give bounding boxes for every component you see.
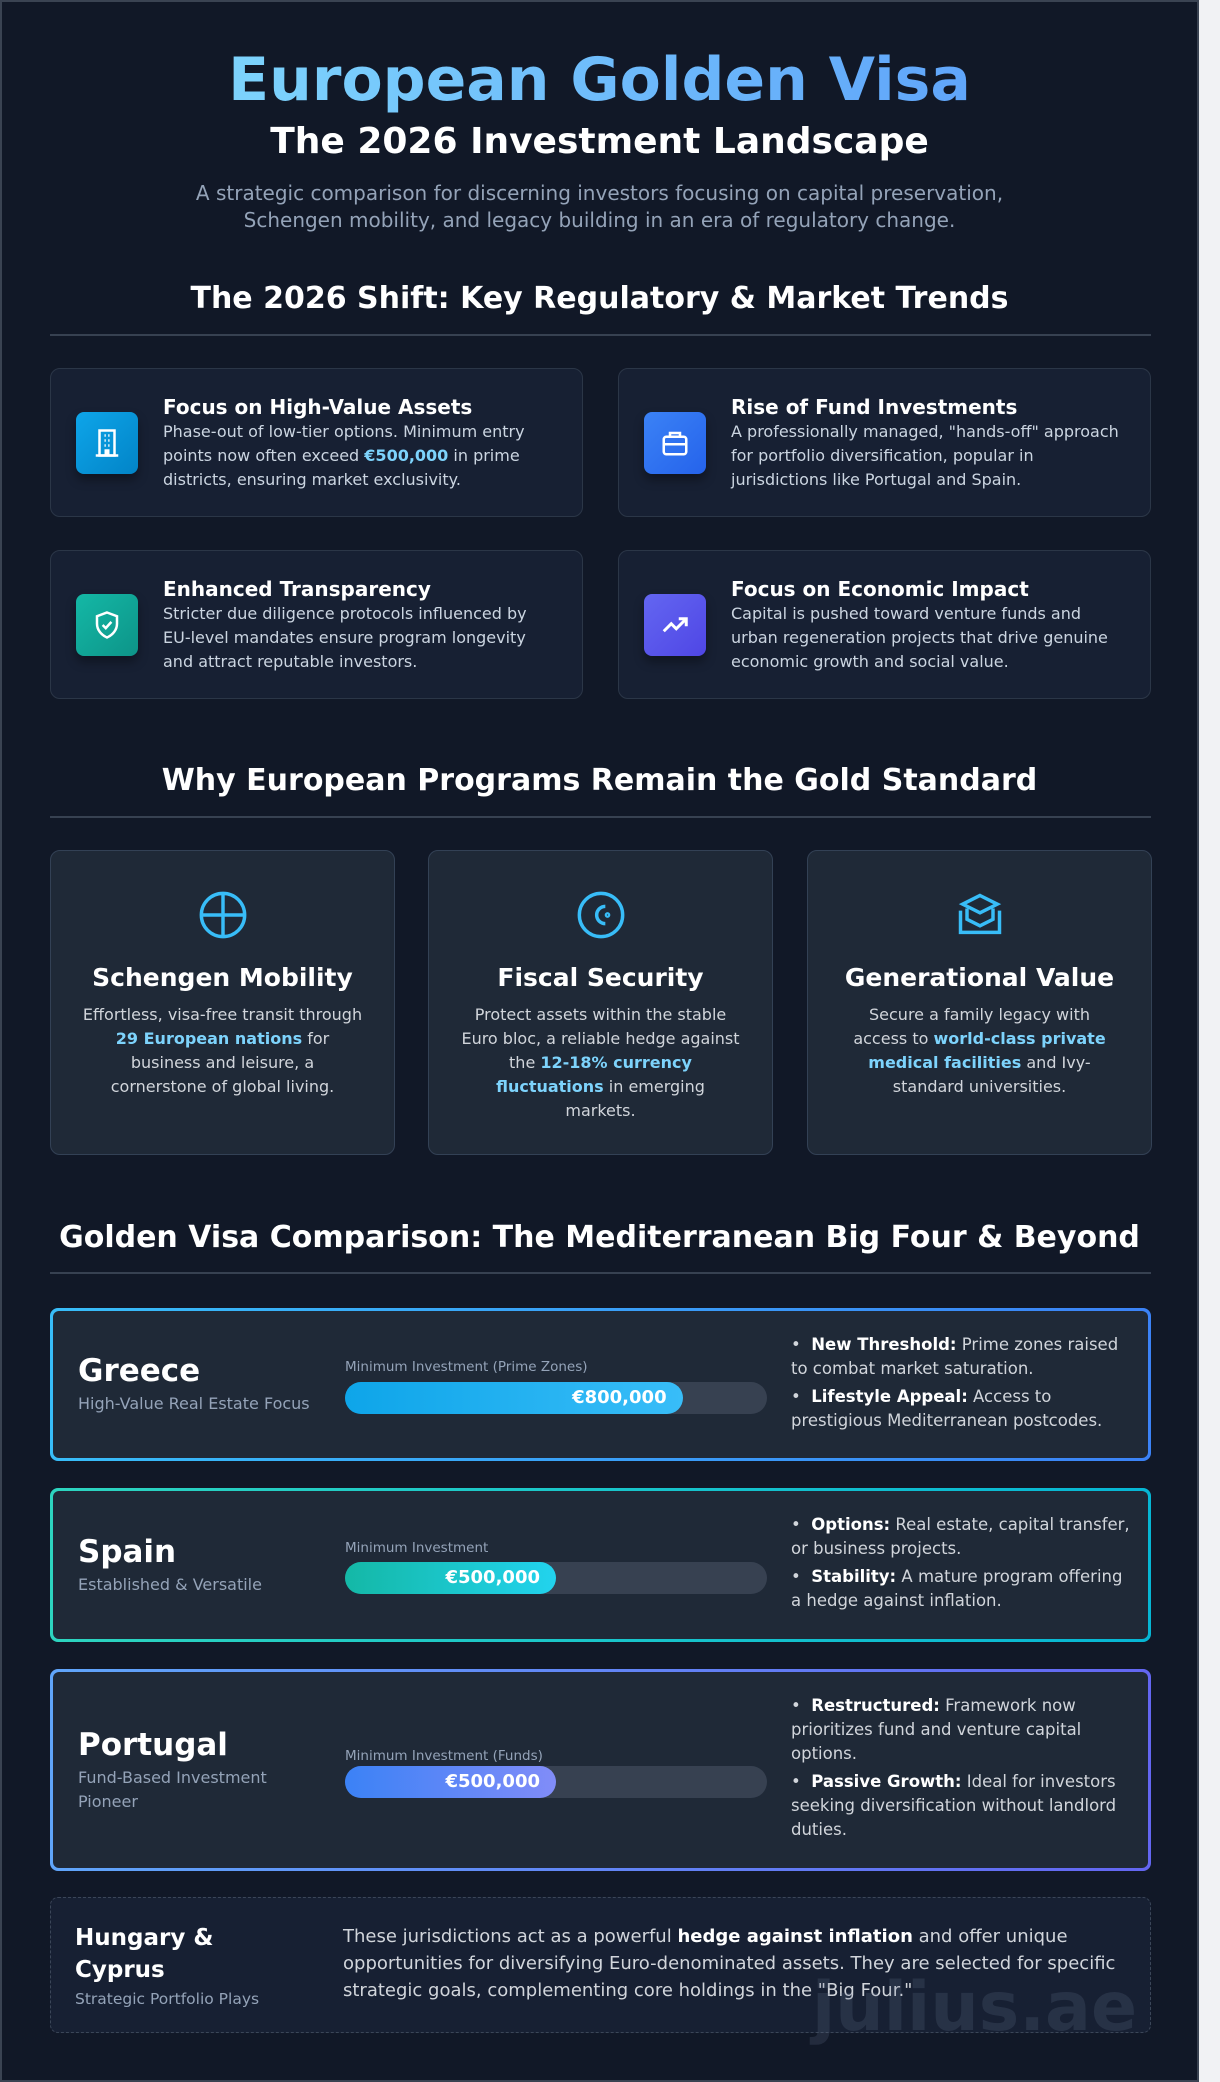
card: generational: Secure a family legacy with: [869, 1005, 1090, 1024]
card: generational: Generational Value: [845, 963, 1114, 992]
panel: portugal: options.: [791, 1744, 857, 1763]
bar: portugal: [345, 1766, 767, 1798]
card: fiscal: [428, 850, 773, 1155]
watermark: julius.ae: [812, 1968, 1137, 2047]
panel: spain: Minimum Investment: [345, 1540, 488, 1556]
card: fund investments: Rise of Fund Investments: [731, 395, 1017, 419]
panel: portugal: Portugal: [78, 1727, 228, 1763]
panel: hungary & cyprus: [50, 1897, 1151, 2033]
panel: spain: [50, 1488, 1151, 1642]
icon: currency: [578, 892, 624, 938]
panel: portugal: • Restructured: Framework now: [791, 1696, 1076, 1715]
icon: shield: [76, 594, 138, 656]
icon: building: [76, 412, 138, 474]
panel: hungary & cyprus: Hungary &: [75, 1925, 213, 1951]
panel: hungary & cyprus: These jurisdictions act as a powerful hedge against inflation and offer unique opportunities for diversifying Euro-denominated assets. They are selected for specific strategic goals, complementing core holdings in the "Big Four.": [343, 1926, 1115, 2001]
card: fiscal: Fiscal Security: [497, 963, 704, 992]
panel: spain: • Stability: A mature program offering: [791, 1567, 1122, 1586]
card: schengen: 29 European nations for: [116, 1029, 329, 1048]
card: schengen: cornerstone of global living.: [111, 1077, 334, 1096]
card: high-value assets: [50, 368, 583, 517]
card: fiscal: Protect assets within the stable: [475, 1005, 726, 1024]
panel: spain: Established & Versatile: [78, 1575, 262, 1594]
card: fund investments: [618, 368, 1151, 517]
panel: spain: or business projects.: [791, 1539, 961, 1558]
icon: graduation: [958, 894, 1002, 934]
panel: portugal: • Passive Growth: Ideal for investors: [791, 1772, 1116, 1791]
card: fiscal: Euro bloc, a reliable hedge against: [461, 1029, 740, 1048]
panel: greece: prestigious Mediterranean postcodes.: [791, 1411, 1102, 1430]
card: generational: access to world-class private: [853, 1029, 1106, 1048]
icon: briefcase: [644, 412, 706, 474]
card: transparency: [50, 550, 583, 699]
card: economic impact: urban regeneration projects that drive genuine: [731, 628, 1108, 647]
panel: spain: • Options: Real estate, capital transfer,: [791, 1515, 1130, 1534]
heading: gold standard: Why European Programs Remain the Gold Standard: [162, 763, 1037, 798]
bar: greece: €800,000: [572, 1387, 667, 1408]
card: fiscal: markets.: [565, 1101, 636, 1120]
panel: spain: a hedge against inflation.: [791, 1591, 1002, 1610]
card: schengen: Effortless, visa-free transit through: [83, 1005, 362, 1024]
card: fiscal: the 12-18% currency: [509, 1053, 692, 1072]
card: fund investments: A professionally managed, "hands-off" approach: [731, 422, 1119, 441]
intro text: Schengen mobility, and legacy building in an era of regulatory change.: [244, 208, 955, 232]
panel: portugal: seeking diversification without landlord: [791, 1796, 1116, 1815]
bar: portugal: €500,000: [445, 1771, 540, 1792]
panel: hungary & cyprus: Cyprus: [75, 1957, 165, 1983]
card: high-value assets: points now often exceed €500,000 in prime: [163, 446, 520, 465]
card: transparency: Enhanced Transparency: [163, 577, 431, 601]
panel: portugal: Minimum Investment (Funds): [345, 1748, 543, 1764]
card: economic impact: economic growth and social value.: [731, 652, 1009, 671]
intro text: [196, 181, 1003, 232]
panel: portugal: duties.: [791, 1820, 847, 1839]
panel: greece: • Lifestyle Appeal: Access to: [791, 1387, 1051, 1406]
card: economic impact: Capital is pushed toward venture funds and: [731, 604, 1081, 623]
card: generational: medical facilities and Ivy-: [868, 1053, 1091, 1072]
panel: portugal: [50, 1669, 1151, 1871]
bar: greece: [345, 1382, 767, 1414]
card: schengen: business and leisure, a: [131, 1053, 314, 1072]
card: high-value assets: districts, ensuring market exclusivity.: [163, 470, 461, 489]
subtitle: The 2026 Investment Landscape: [270, 121, 929, 162]
heading: 2026 shift: The 2026 Shift: Key Regulatory & Market Trends: [190, 281, 1009, 316]
card: generational: [807, 850, 1152, 1155]
panel: portugal: prioritizes fund and venture capital: [791, 1720, 1081, 1739]
bar: spain: [345, 1562, 767, 1594]
icon: globe: [200, 892, 246, 938]
card: fund investments: jurisdictions like Portugal and Spain.: [731, 470, 1021, 489]
bar: spain: €500,000: [445, 1567, 540, 1588]
card: transparency: EU-level mandates ensure program longevity: [163, 628, 526, 647]
icon: trend: [644, 594, 706, 656]
panel: hungary & cyprus: Strategic Portfolio Plays: [75, 1990, 259, 2008]
title: European Golden Visa: [228, 45, 971, 115]
card: economic impact: Focus on Economic Impact: [731, 577, 1029, 601]
panel: portugal: Fund-Based Investment: [78, 1768, 267, 1787]
heading: comparison: Golden Visa Comparison: The Mediterranean Big Four & Beyond: [59, 1220, 1140, 1255]
panel: greece: to combat market saturation.: [791, 1359, 1034, 1378]
card: high-value assets: Focus on High-Value Assets: [163, 395, 472, 419]
card: high-value assets: Phase-out of low-tier options. Minimum entry: [163, 422, 525, 441]
panel: greece: [50, 1308, 1151, 1461]
card: generational: standard universities.: [893, 1077, 1066, 1096]
panel: greece: Minimum Investment (Prime Zones): [345, 1359, 588, 1375]
card: fund investments: for portfolio diversification, popular in: [731, 446, 1034, 465]
intro text: A strategic comparison for discerning investors focusing on capital preservation,: [196, 181, 1003, 205]
panel: spain: Spain: [78, 1534, 176, 1570]
card: fiscal: fluctuations in emerging: [496, 1077, 705, 1096]
panel: greece: Greece: [78, 1353, 200, 1389]
card: schengen: [50, 850, 395, 1155]
card: schengen: Schengen Mobility: [92, 963, 353, 992]
panel: greece: • New Threshold: Prime zones raised: [791, 1335, 1118, 1354]
card: transparency: Stricter due diligence protocols influenced by: [163, 604, 527, 623]
panel: greece: High-Value Real Estate Focus: [78, 1394, 310, 1413]
panel: portugal: Pioneer: [78, 1792, 138, 1811]
card: transparency: and attract reputable investors.: [163, 652, 417, 671]
card: economic impact: [618, 550, 1151, 699]
